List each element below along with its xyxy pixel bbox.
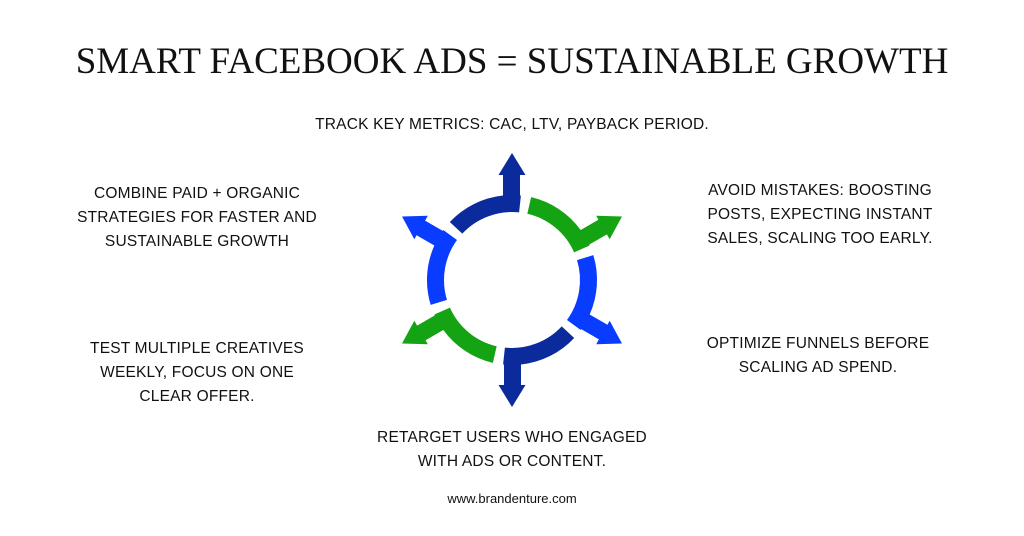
text: combine paid organic: [77, 185, 317, 250]
text: optimize funnels: SCALING AD SPEND.: [739, 359, 897, 376]
text: retarget: WITH ADS OR CONTENT.: [418, 453, 606, 470]
text: track metrics: TRACK KEY METRICS: CAC, LTV, PAYBACK PERIOD.: [315, 116, 709, 133]
text: retarget: [377, 429, 647, 470]
text: test creatives: [90, 340, 304, 405]
arrow: upper left blue: [371, 205, 479, 311]
text: optimize funnels: OPTIMIZE FUNNELS BEFORE: [707, 335, 929, 352]
arrow: top navy: [450, 153, 526, 234]
arrow: bottom navy: [498, 326, 574, 407]
text: test creatives: CLEAR OFFER.: [139, 388, 255, 405]
text: optimize funnels: [707, 335, 929, 376]
text: combine paid organic: SUSTAINABLE GROWTH: [105, 233, 289, 250]
text: combine paid organic: COMBINE PAID + ORGANIC: [94, 185, 300, 202]
text: avoid mistakes: SALES, SCALING TOO EARLY.: [707, 230, 933, 247]
arrow: upper right green: [521, 163, 629, 268]
text: avoid mistakes: POSTS, EXPECTING INSTANT: [708, 206, 932, 223]
text: avoid mistakes: [707, 182, 933, 247]
footer url: www.brandenture.com: [447, 491, 577, 506]
text: test creatives: TEST MULTIPLE CREATIVES: [90, 340, 304, 357]
text: avoid mistakes: AVOID MISTAKES: BOOSTING: [708, 182, 932, 199]
arrow: lower left green: [395, 292, 503, 397]
text: combine paid organic: STRATEGIES FOR FASTER AND: [77, 209, 317, 226]
text: retarget: RETARGET USERS WHO ENGAGED: [377, 429, 647, 446]
title: SMART FACEBOOK ADS = SUSTAINABLE GROWTH: [76, 41, 948, 82]
arrow: lower right blue: [545, 249, 653, 355]
text: test creatives: WEEKLY, FOCUS ON ONE: [100, 364, 294, 381]
